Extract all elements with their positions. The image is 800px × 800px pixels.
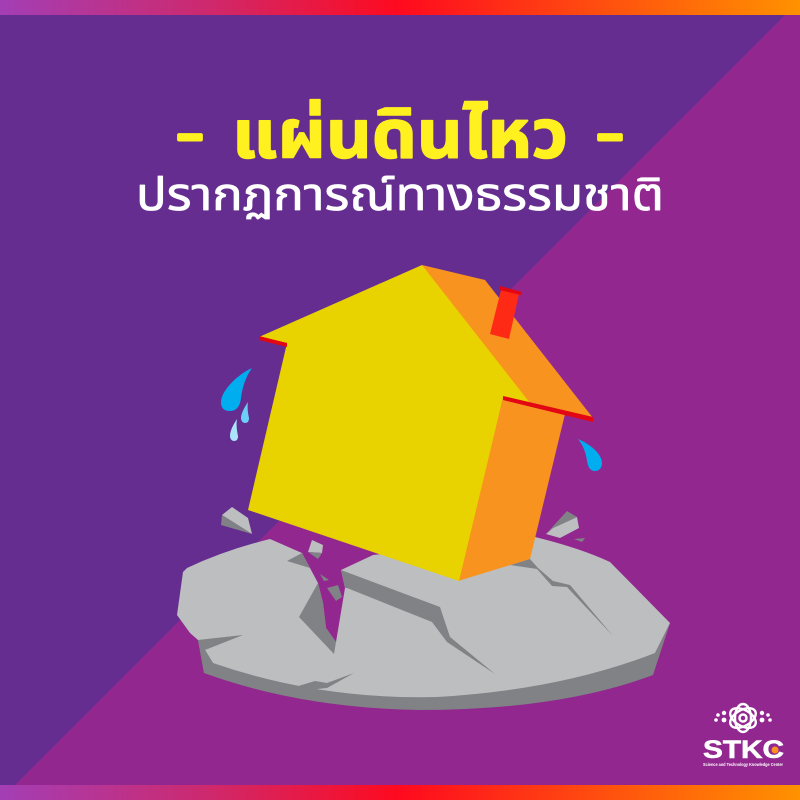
title main text: แผ่นดินไหว	[232, 96, 568, 172]
logo wordmark: STKC	[703, 736, 784, 764]
chimney cap	[499, 286, 522, 295]
left eave strip	[259, 336, 287, 347]
chimney	[490, 290, 519, 339]
light drop	[230, 419, 238, 441]
ground top surface	[177, 537, 670, 697]
house yellow front	[248, 265, 530, 581]
logo: STKC	[703, 704, 784, 767]
crack: long middle	[341, 570, 495, 674]
fragment: crack top	[308, 540, 323, 559]
big blue drop	[221, 368, 252, 411]
title left dash: –	[178, 110, 202, 159]
house orange roof	[422, 265, 593, 418]
top gradient bar	[0, 0, 800, 15]
crack: central wall	[299, 583, 336, 654]
title right dash: –	[598, 110, 622, 159]
fragment: upper left	[221, 507, 252, 534]
crack: upper left lip	[287, 553, 310, 568]
illustration: cracked ground	[177, 537, 670, 710]
fragment: crack small	[320, 574, 329, 581]
subtitle: ปรากฏการณ์ทางธรรมชาติ	[136, 168, 664, 220]
title	[178, 96, 622, 172]
fragment: small right	[574, 538, 585, 542]
logo orange dot	[772, 746, 778, 754]
water drops left	[221, 368, 252, 441]
rock fragments	[221, 507, 585, 601]
logo tagline: Science and Technology Knowledge Center	[703, 762, 783, 767]
right eave strip	[503, 396, 593, 422]
water drop right	[578, 439, 602, 471]
fragment: upper right	[546, 511, 579, 538]
fragment: crack middle	[327, 585, 342, 601]
logo atom icon	[714, 704, 772, 732]
bottom gradient bar	[0, 785, 800, 800]
illustration: tilted house	[248, 265, 593, 581]
crack: right	[510, 559, 613, 636]
crack: bottom edge	[295, 673, 354, 690]
ground base thickness	[198, 623, 670, 710]
house orange side wall	[458, 398, 565, 581]
medium drop	[241, 402, 249, 423]
crack: left edge	[198, 635, 243, 673]
